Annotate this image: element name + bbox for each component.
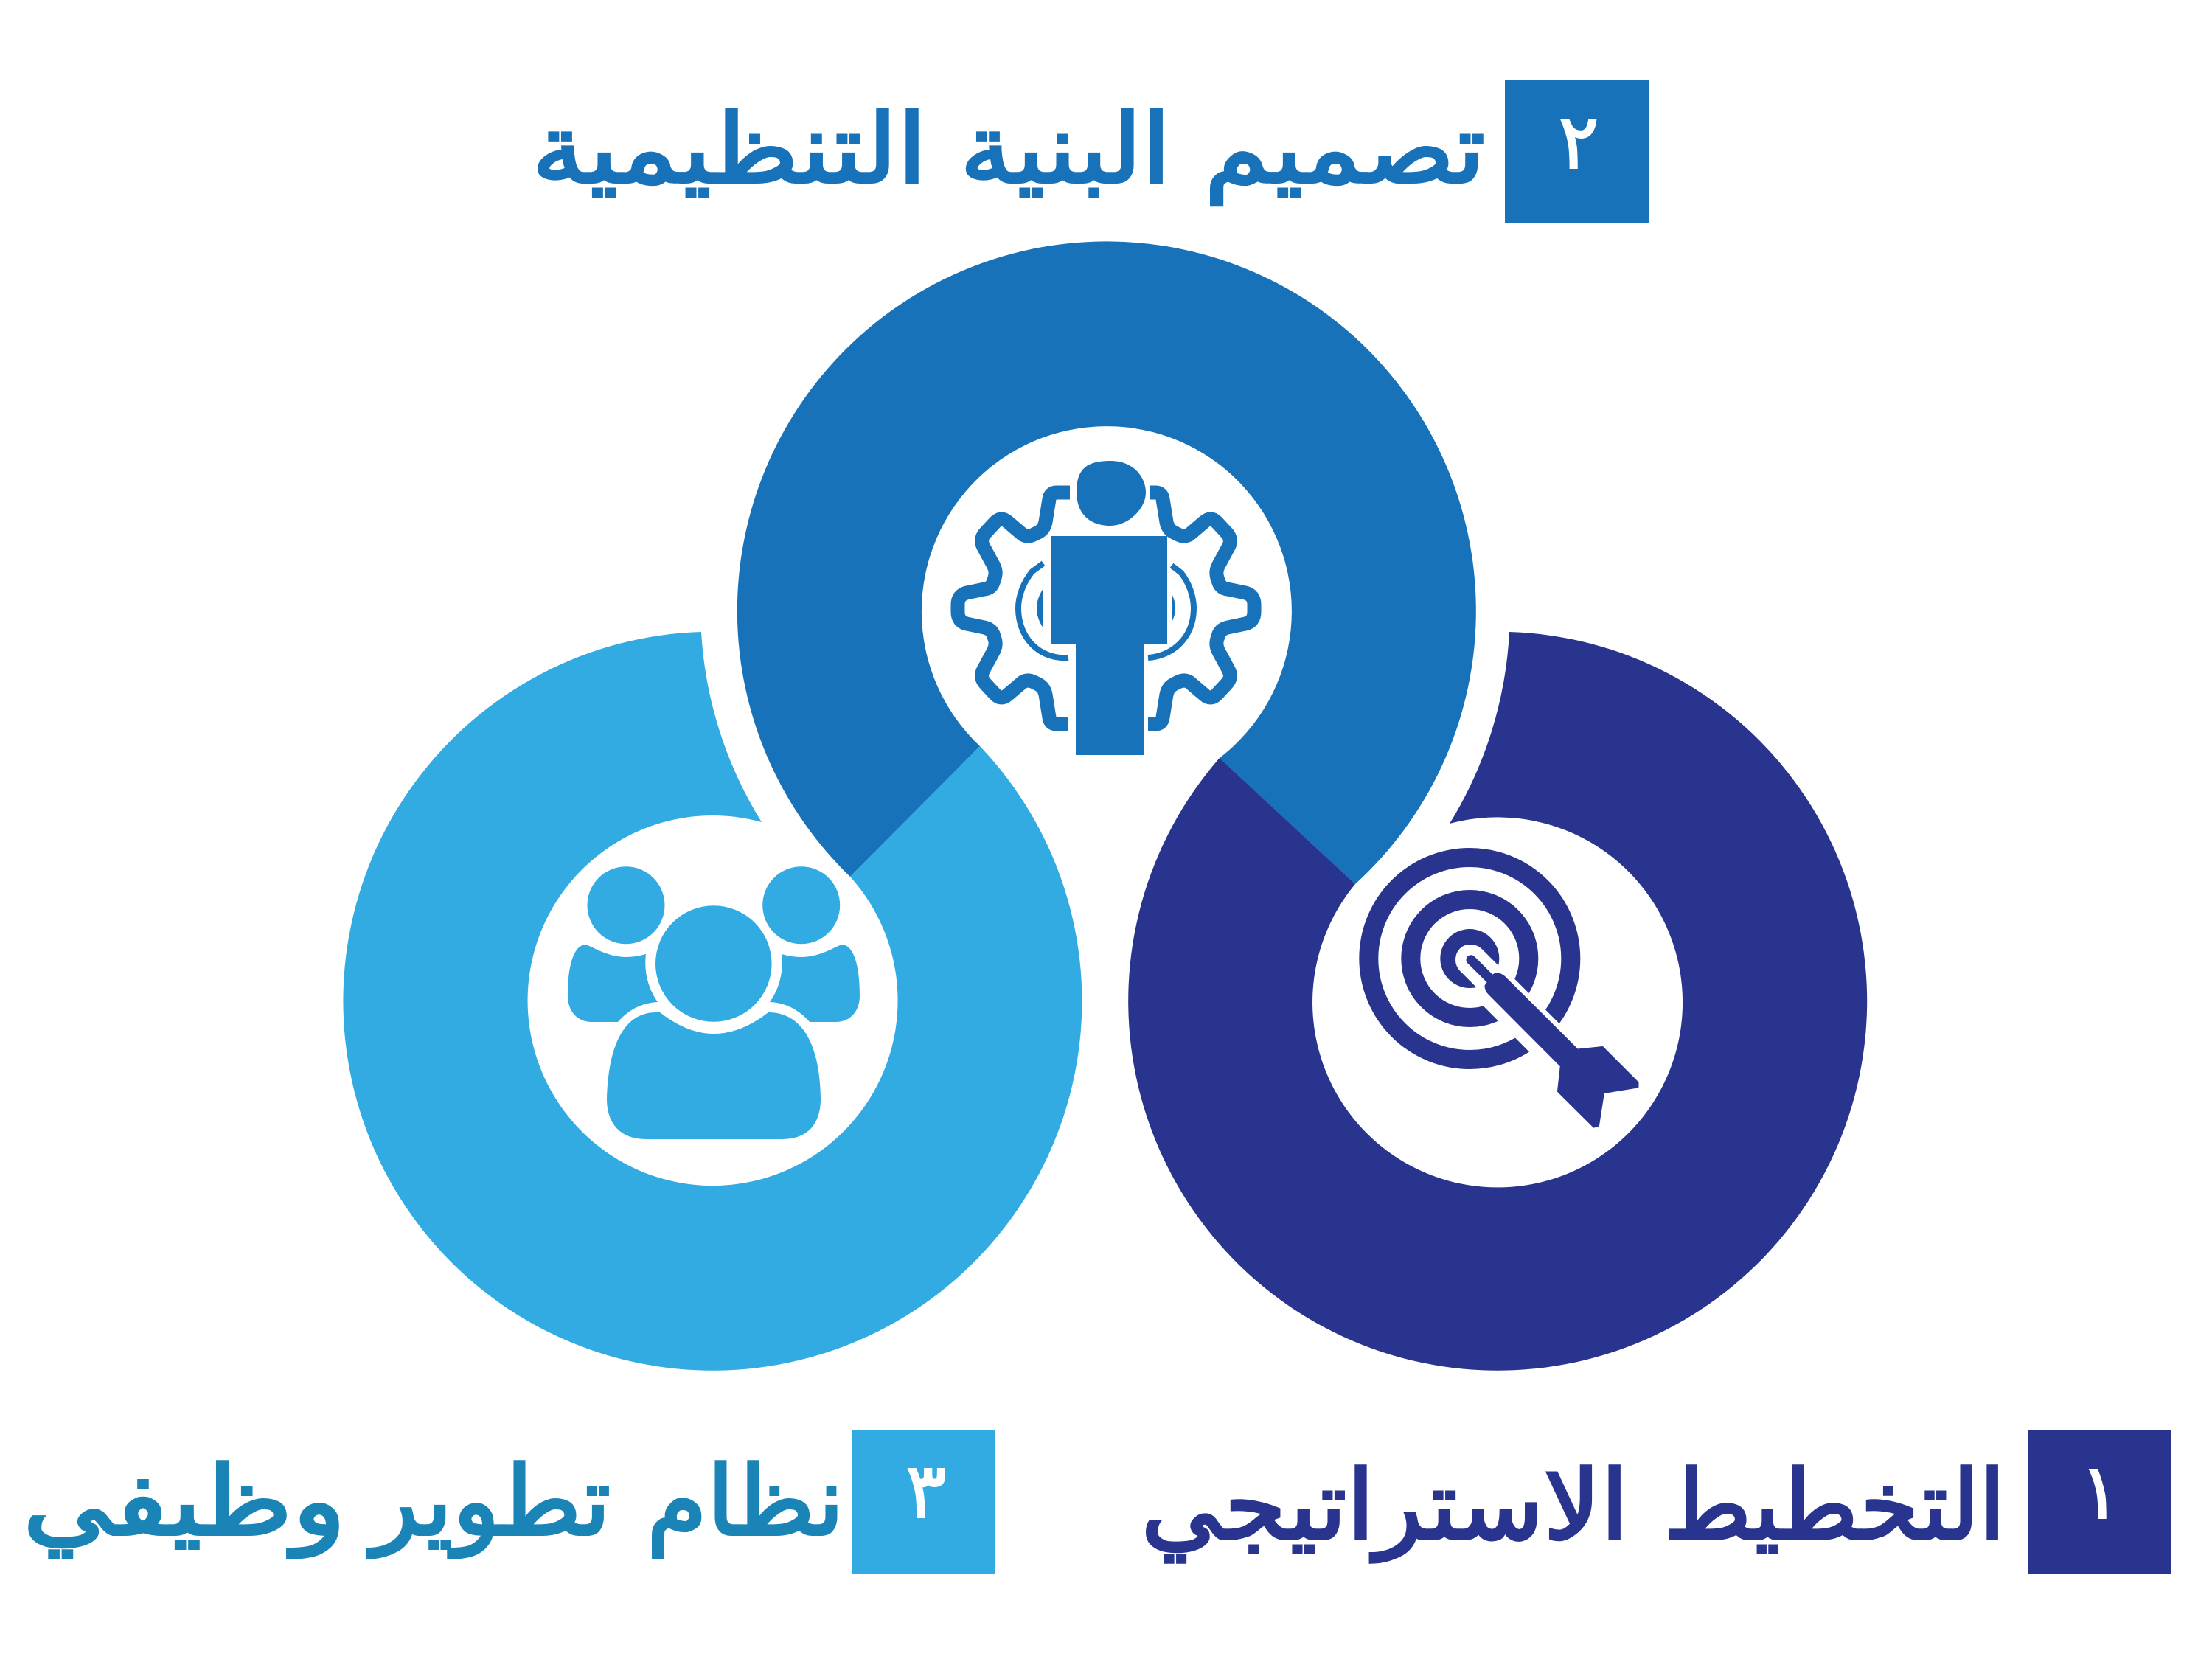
- number box 3: [852, 1430, 995, 1574]
- person head: [1077, 461, 1146, 526]
- panel: organisational structure design (top, mid blue): [737, 241, 1476, 884]
- icon: group of three people: [568, 866, 860, 1139]
- centre head: [655, 905, 772, 1022]
- gear outline right half: [1148, 493, 1254, 724]
- gear outline left half: [958, 493, 1070, 724]
- title text 3: وظيفي: [23, 1445, 346, 1558]
- panel: career development system (left, light blue): [343, 632, 1082, 1371]
- arrow shaft and fletching: [1486, 974, 1638, 1127]
- number 2: ٢: [1558, 97, 1599, 187]
- ring: left segment: [343, 632, 1082, 1371]
- right head: [762, 866, 840, 944]
- left body: [568, 945, 658, 1022]
- title text 1: [1141, 1450, 2006, 1562]
- number 3: ٣: [905, 1446, 947, 1536]
- heading 1: strategic planning: [1141, 1430, 2171, 1574]
- panel: strategic planning (right, navy): [1128, 632, 1867, 1371]
- number 1: ١: [2079, 1447, 2121, 1537]
- title text 1: الاستراتيجي: [1141, 1450, 1628, 1562]
- gear hub crescent right: [1172, 594, 1175, 622]
- heading 2: organisational structure design: [532, 80, 1649, 223]
- title text 3: [23, 1445, 844, 1558]
- white channel cut around arrow: [1471, 960, 1585, 1079]
- ring: top teardrop segment: [737, 241, 1476, 884]
- right body: [770, 945, 860, 1022]
- icon: target with arrow: [1368, 858, 1638, 1127]
- arrow tip: [1471, 960, 1491, 979]
- gear hub crescent left: [1037, 588, 1043, 628]
- number box 1: [2028, 1430, 2171, 1574]
- title text 2: التنظيمية: [532, 93, 927, 205]
- title text 3: تطوير: [366, 1445, 611, 1558]
- title text 3: نظام: [647, 1445, 844, 1557]
- centre body: [607, 1012, 821, 1139]
- icon: person in front of gear: [958, 461, 1254, 755]
- title text 2: تصميم: [1205, 93, 1485, 206]
- target rings: [1368, 858, 1571, 1060]
- number box 2: [1505, 80, 1649, 223]
- gear inner arc right: [1148, 566, 1194, 658]
- left head: [587, 866, 665, 944]
- person body: [1051, 536, 1167, 755]
- gear inner arc left: [1018, 563, 1068, 658]
- heading 3: career development system: [23, 1430, 995, 1574]
- ring: right segment: [1128, 632, 1867, 1371]
- title text 1: التخطيط: [1663, 1450, 2006, 1562]
- title text 2: [532, 93, 1485, 206]
- title text 2: البنية: [960, 93, 1171, 205]
